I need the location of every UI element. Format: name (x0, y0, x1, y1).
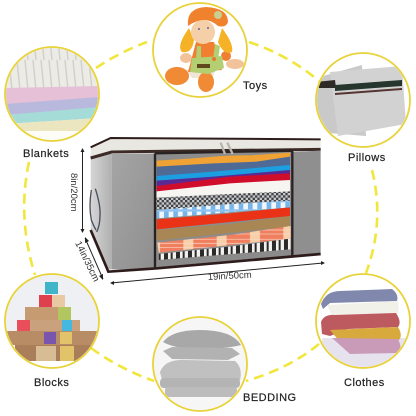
panel: storage bag (90, 138, 321, 272)
dimension: width (110, 261, 325, 285)
label: clothes: Clothes (344, 377, 385, 389)
dashed connector ring (24, 42, 377, 381)
bag lid (91, 138, 321, 158)
panel: blankets (0, 46, 104, 160)
height label: 8in/20cm (68, 173, 79, 212)
label: pillows: Pillows (348, 152, 386, 164)
dimension: height (68, 148, 84, 233)
label: toys: Toys (243, 80, 268, 92)
label: blocks: Blocks (34, 377, 69, 389)
label: bedding: BEDDING (243, 392, 297, 404)
panel: blocks (5, 274, 101, 389)
label: blankets: Blankets (23, 148, 69, 160)
dimension: depth (72, 237, 103, 284)
window with folded clothes (155, 151, 292, 267)
panel: toys (150, 0, 268, 100)
width label: 19in/50cm (208, 270, 252, 283)
depth label: 14in/35cm (72, 239, 101, 284)
bag bottom trim (91, 230, 321, 272)
bag front grey panels (112, 153, 155, 269)
bag side handle (90, 189, 100, 232)
panel: bedding (153, 317, 297, 411)
icon: doll (165, 7, 244, 92)
bag side panel (91, 153, 112, 269)
panel: pillows (315, 52, 411, 164)
zipper pull (221, 143, 233, 154)
panel: clothes (315, 274, 411, 389)
